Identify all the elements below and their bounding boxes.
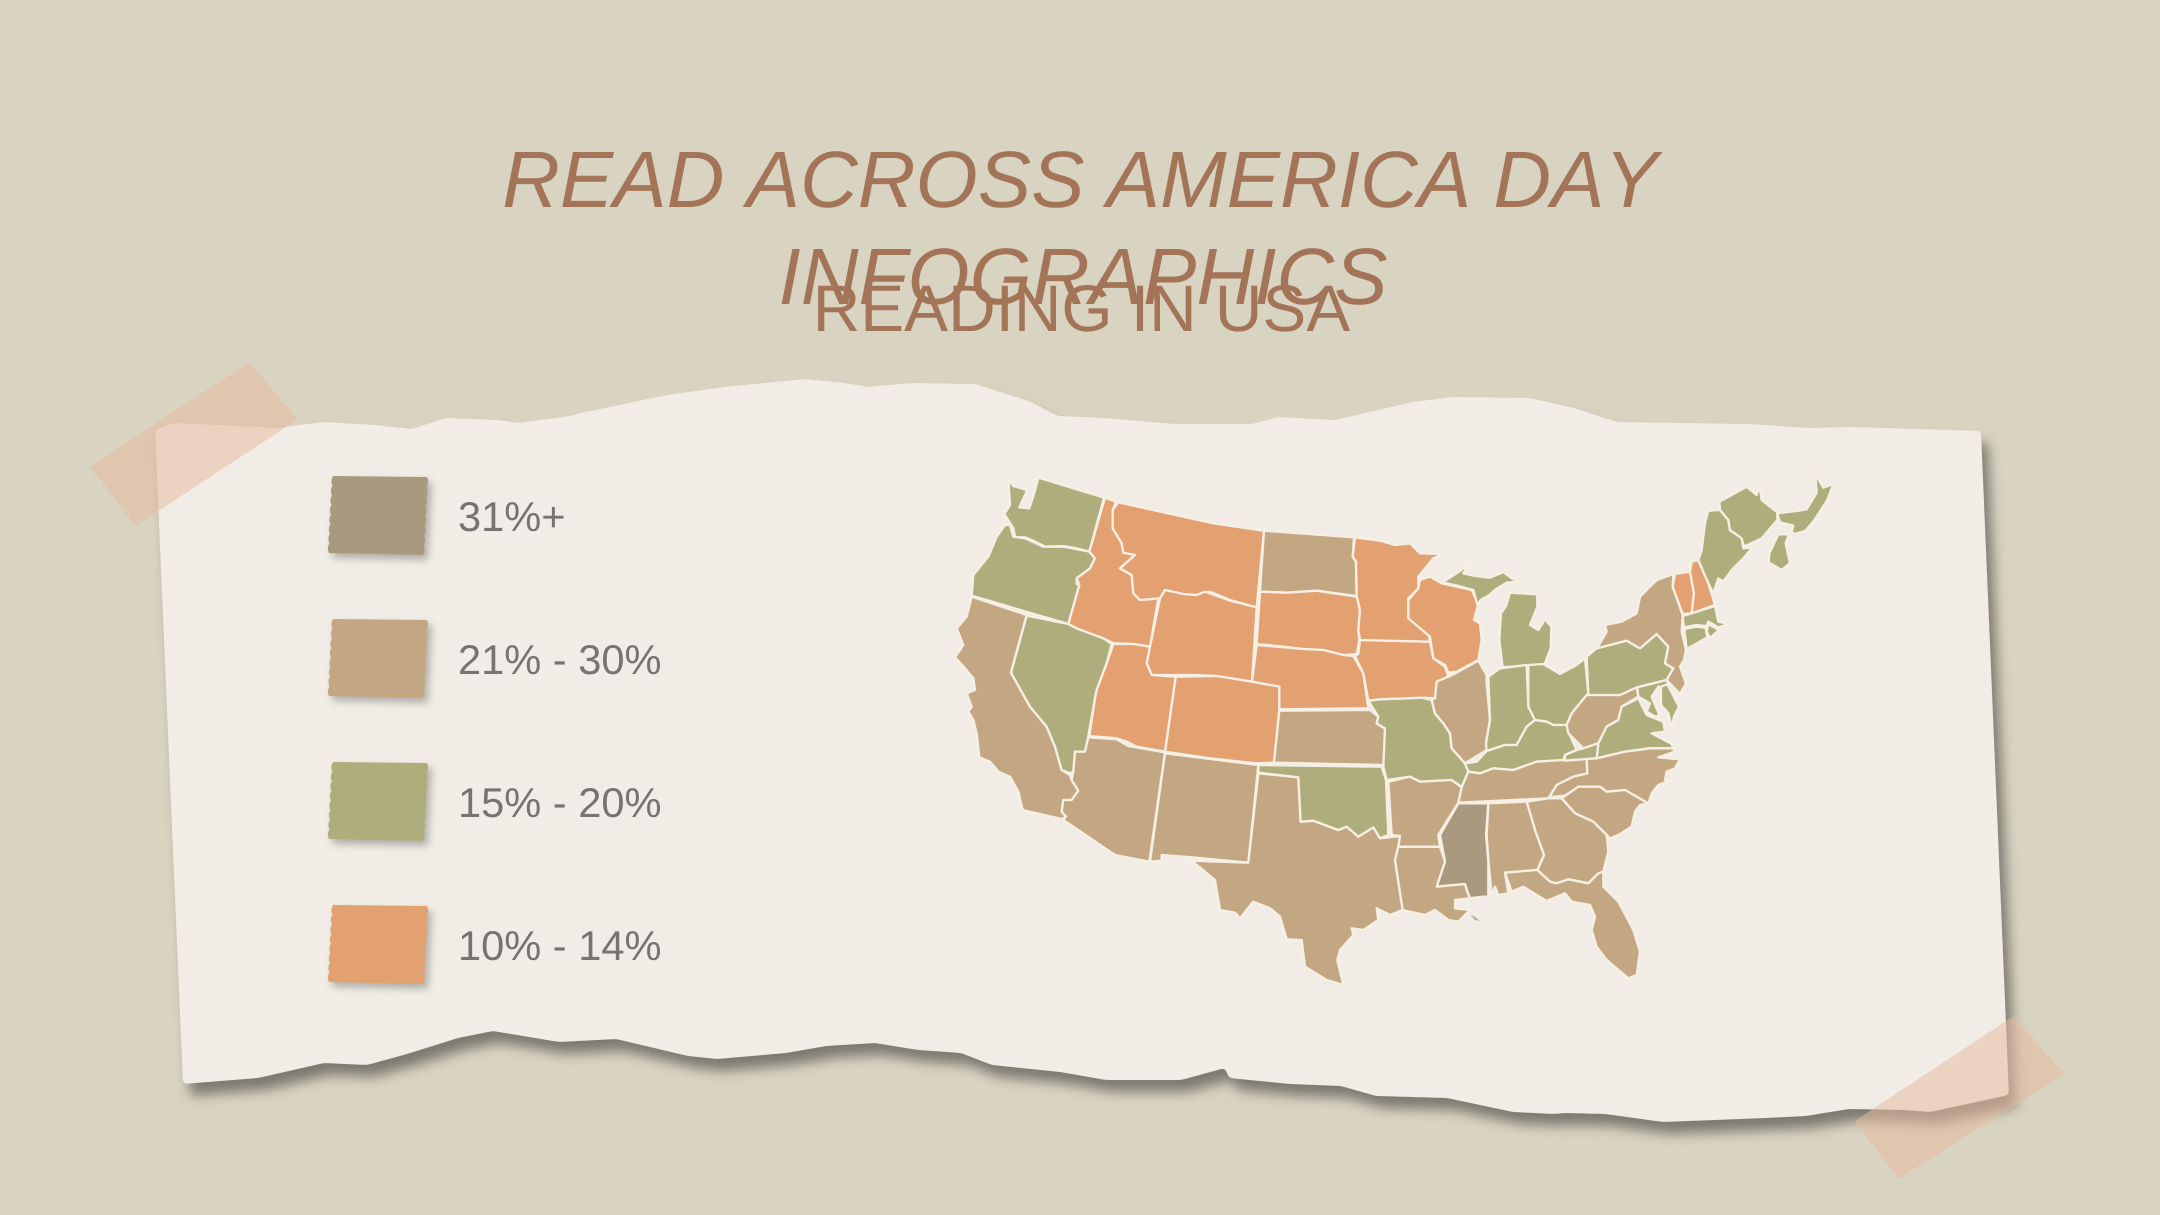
state: Ohio bbox=[1528, 658, 1588, 725]
state: Oklahoma bbox=[1258, 765, 1388, 838]
state: southwest Virginia bbox=[1565, 743, 1598, 761]
state: Florida bbox=[1505, 870, 1640, 978]
state: Rhode Island bbox=[1707, 624, 1719, 638]
state: Georgia bbox=[1527, 798, 1608, 883]
state: Nebraska bbox=[1252, 645, 1368, 709]
region: northeast landmass A bbox=[1719, 485, 1777, 547]
title: READ ACROSS AMERICA DAY bbox=[502, 135, 1664, 224]
state: Oregon bbox=[972, 525, 1095, 624]
state: Wisconsin bbox=[1408, 577, 1482, 673]
state: Mississippi bbox=[1437, 803, 1488, 898]
state: Michigan upper peninsula bbox=[1443, 563, 1521, 605]
state: Louisiana bbox=[1395, 847, 1470, 922]
state: Virginia bbox=[1597, 698, 1673, 758]
state: Kansas bbox=[1274, 710, 1385, 765]
state: Maine bbox=[1698, 510, 1753, 593]
legend swatch: 15% - 20% bbox=[328, 762, 428, 841]
state: South Dakota bbox=[1257, 591, 1360, 655]
state: Missouri bbox=[1368, 698, 1468, 787]
state: New Hampshire bbox=[1690, 560, 1715, 613]
state: Massachusetts bbox=[1683, 606, 1729, 627]
legend label: 15% - 20%: 15% - 20% bbox=[458, 779, 661, 826]
state: Arkansas bbox=[1388, 777, 1462, 847]
state: California bbox=[955, 597, 1078, 819]
panel: torn paper sheet bbox=[155, 379, 2009, 1122]
state: Illinois bbox=[1432, 661, 1490, 763]
state: Maryland bbox=[1637, 680, 1669, 717]
state: Arizona bbox=[1062, 737, 1165, 862]
legend label: 21% - 30%: 21% - 30% bbox=[458, 636, 661, 683]
state: Kentucky bbox=[1465, 720, 1577, 773]
state: Delaware bbox=[1661, 684, 1679, 727]
state: Vermont bbox=[1673, 572, 1694, 614]
state: North Carolina bbox=[1549, 748, 1680, 803]
state: South Carolina bbox=[1562, 787, 1648, 838]
state: West Virginia bbox=[1567, 687, 1638, 748]
state: Pennsylvania bbox=[1587, 634, 1673, 695]
state: Connecticut bbox=[1684, 627, 1707, 649]
map: USA reading by state bbox=[955, 474, 1833, 985]
region: northeast island bbox=[1769, 534, 1790, 570]
state: Iowa bbox=[1355, 640, 1448, 701]
state: North Dakota bbox=[1260, 531, 1357, 596]
title: INFOGRAPHICS bbox=[779, 232, 1387, 321]
state: Alabama bbox=[1487, 802, 1544, 895]
state: Wyoming bbox=[1147, 590, 1257, 682]
island: gulf coast bbox=[1470, 915, 1480, 921]
state: Texas bbox=[1192, 773, 1403, 985]
legend swatch: 10% - 14% bbox=[328, 905, 428, 984]
tape: bottom right bbox=[1856, 1017, 2063, 1178]
tape: top left bbox=[91, 363, 297, 525]
subtitle: READING IN USA bbox=[813, 271, 1350, 345]
state: Colorado bbox=[1165, 676, 1279, 763]
state: New York and New Jersey bbox=[1597, 574, 1686, 694]
state: Nevada bbox=[1011, 616, 1112, 773]
state: Montana bbox=[1113, 502, 1264, 607]
state: Minnesota bbox=[1353, 537, 1443, 642]
state: Indiana bbox=[1486, 665, 1535, 751]
legend label: 31%+: 31%+ bbox=[458, 493, 566, 540]
state: New Mexico bbox=[1150, 753, 1258, 863]
legend bbox=[328, 476, 661, 984]
state: Utah bbox=[1089, 644, 1176, 752]
state: Tennessee bbox=[1458, 759, 1587, 803]
state: Michigan lower peninsula bbox=[1499, 593, 1551, 667]
state: Idaho bbox=[1068, 498, 1158, 647]
legend label: 10% - 14%: 10% - 14% bbox=[458, 922, 661, 969]
legend swatch: 21% - 30% bbox=[328, 619, 428, 698]
title bbox=[502, 135, 1664, 321]
legend swatch: 31%+ bbox=[328, 476, 428, 555]
state: Washington bbox=[1004, 478, 1104, 552]
region: northeast landmass B bbox=[1777, 474, 1833, 534]
